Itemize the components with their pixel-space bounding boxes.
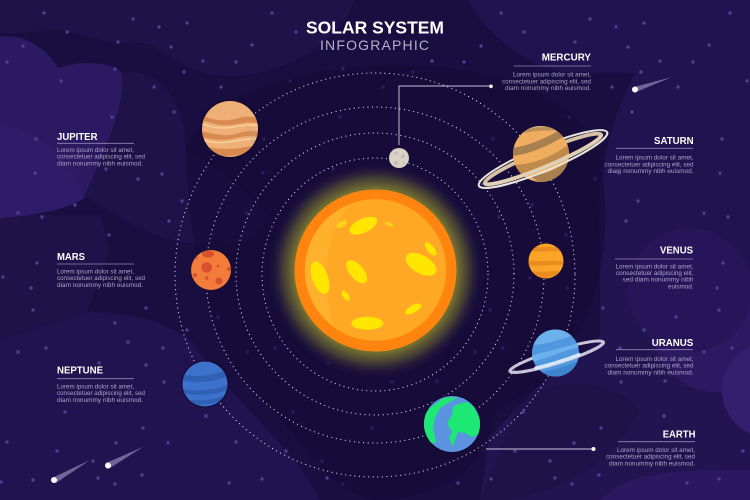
text block: mercury: consectetuer adipiscing elit, sed [502,79,591,85]
dark nebula behind the orbits [186,65,605,500]
planet: earth [420,395,482,453]
text block: mars: consectetuer adipiscing elit, sed [57,276,145,282]
text block: venus: euismod. [668,284,694,290]
text block: neptune: diam nonummy nibh euismod. [57,398,143,404]
text block: uranus: consectetuer adipiscing elit, sed [604,364,694,370]
text block: venus: VENUS [660,246,693,256]
comet: bottom middle [105,447,143,468]
text block: neptune: NEPTUNE [57,366,103,376]
planet: neptune [182,360,228,408]
text block: venus [615,246,694,290]
text block: mars: diam nonummy nibh euismod. [57,283,143,289]
text block: saturn: consectetuer adipiscing elit, sed [604,162,694,168]
text block: mercury [502,53,591,92]
comet: bottom left [51,460,90,483]
text block: mercury: Lorem ipsum dolor sit amet, [513,72,591,78]
connector: earth [486,447,596,451]
text block: venus: Lorem ipsum dolor sit amet, [616,264,694,270]
text block: earth: EARTH [663,430,696,441]
text block: neptune: consectetuer adipiscing elit, sed [57,391,145,397]
text block: uranus [604,338,694,376]
text block: saturn [604,136,694,175]
orbit rings [175,73,575,477]
text block: mars: Lorem ipsum dolor sit amet, [57,270,134,276]
connector: mercury [399,84,493,145]
text block: mercury: diam nonummy nibh euismod. [505,86,591,92]
text block: saturn: SATURN [654,136,694,147]
planet: mercury [389,148,409,168]
text block: uranus: Lorem ipsum dolor sit amet, [616,357,694,363]
text block: earth: Lorem ipsum dolor sit amet, [617,448,695,454]
sun [268,162,484,378]
text block: uranus: diam nonummy nibh euismod. [608,370,694,376]
text block: mars [57,252,145,289]
text block: neptune: Lorem ipsum dolor sit amet, [57,384,134,390]
text block: saturn: diam nonummy nibh euismod. [608,169,694,175]
comet: top right [632,77,672,92]
text block: mercury: MERCURY [542,53,591,64]
text block: saturn: Lorem ipsum dolor sit amet, [616,156,694,162]
title: SOLAR SYSTEM [306,18,444,38]
text block: jupiter: Lorem ipsum dolor sit amet, [57,148,134,154]
text block: jupiter: JUPITER [57,132,98,143]
text block: earth: consectetuer adipiscing elit, sed [606,455,695,461]
title [306,18,444,53]
planet: jupiter [200,100,260,158]
text block: jupiter: consectetuer adipiscing elit, sed [57,155,145,161]
planet: venus [528,244,564,279]
text block: venus: consectetuer adipiscing elit, [616,271,694,277]
title: INFOGRAPHIC [320,37,429,53]
planet: uranus with ring [508,330,605,376]
planet: mars [190,250,232,290]
text block: venus: sed diam nonummy nibh [622,278,694,284]
text block: earth [606,430,696,467]
text block: earth: diam nonummy nibh euismod. [609,461,695,467]
text block: mars: MARS [57,252,85,263]
text block: jupiter: diam nonummy nibh euismod. [57,161,143,167]
planet: saturn with rings [478,126,608,189]
text block: neptune [57,366,145,404]
text block: jupiter [57,132,145,167]
text block: uranus: URANUS [652,338,694,349]
